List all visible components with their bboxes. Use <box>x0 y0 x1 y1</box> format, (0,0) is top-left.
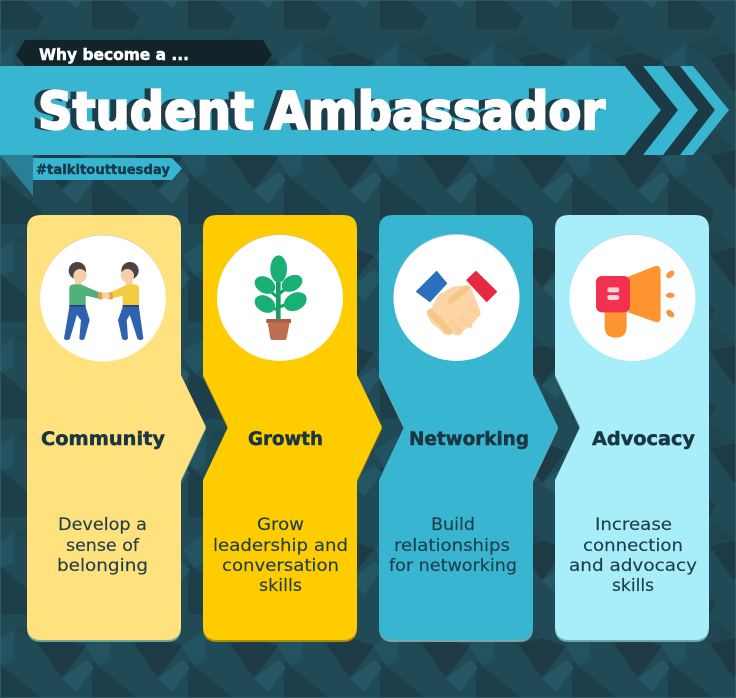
text: advocacy description <box>569 515 697 595</box>
text: advocacy description: and advocacy <box>569 556 697 575</box>
text: networking description: Build <box>431 515 475 534</box>
heading: advocacy: Advocacy <box>592 428 696 450</box>
panel: advocacy <box>555 215 709 642</box>
heading: growth: Growth <box>248 428 323 450</box>
heading: community: Community <box>41 428 166 450</box>
panel: community <box>27 215 206 642</box>
header banner <box>0 40 729 196</box>
hashtag fold <box>0 155 33 196</box>
heading: networking: Networking <box>409 428 529 450</box>
icon: handshake <box>416 271 497 336</box>
hashtag tag: #talkitouttuesday <box>36 162 170 178</box>
text: community description <box>57 515 148 575</box>
icon: megaphone <box>596 266 676 338</box>
main banner shape <box>0 66 661 155</box>
text: growth description: conversation <box>222 556 339 575</box>
text: networking description: relationships <box>394 536 510 555</box>
title: Student Ambassador <box>38 82 605 142</box>
text: networking description: for networking <box>389 556 517 575</box>
title: Student Ambassador <box>32 82 599 142</box>
text: networking description <box>389 515 517 575</box>
text: advocacy description: Increase <box>595 515 672 534</box>
ribbon: why become a: Why become a ... <box>39 45 189 64</box>
text: advocacy description: connection <box>583 536 683 555</box>
text: community description: belonging <box>57 556 148 575</box>
icon: two people shaking hands <box>65 262 143 339</box>
chevrons <box>643 66 729 155</box>
text: growth description: leadership and <box>213 536 348 555</box>
text: advocacy description: skills <box>612 576 654 595</box>
text: growth description: skills <box>259 576 302 595</box>
text: growth description <box>213 515 348 595</box>
text: community description: Develop a <box>58 515 147 534</box>
chevron shadows <box>625 66 715 155</box>
text: growth description: Grow <box>257 515 304 534</box>
icon: potted plant <box>251 255 310 340</box>
ribbon: why become a <box>16 40 272 66</box>
hashtag tag <box>33 158 182 180</box>
panel: networking <box>379 215 558 642</box>
text: community description: sense of <box>66 536 140 555</box>
panel: growth <box>203 215 382 642</box>
